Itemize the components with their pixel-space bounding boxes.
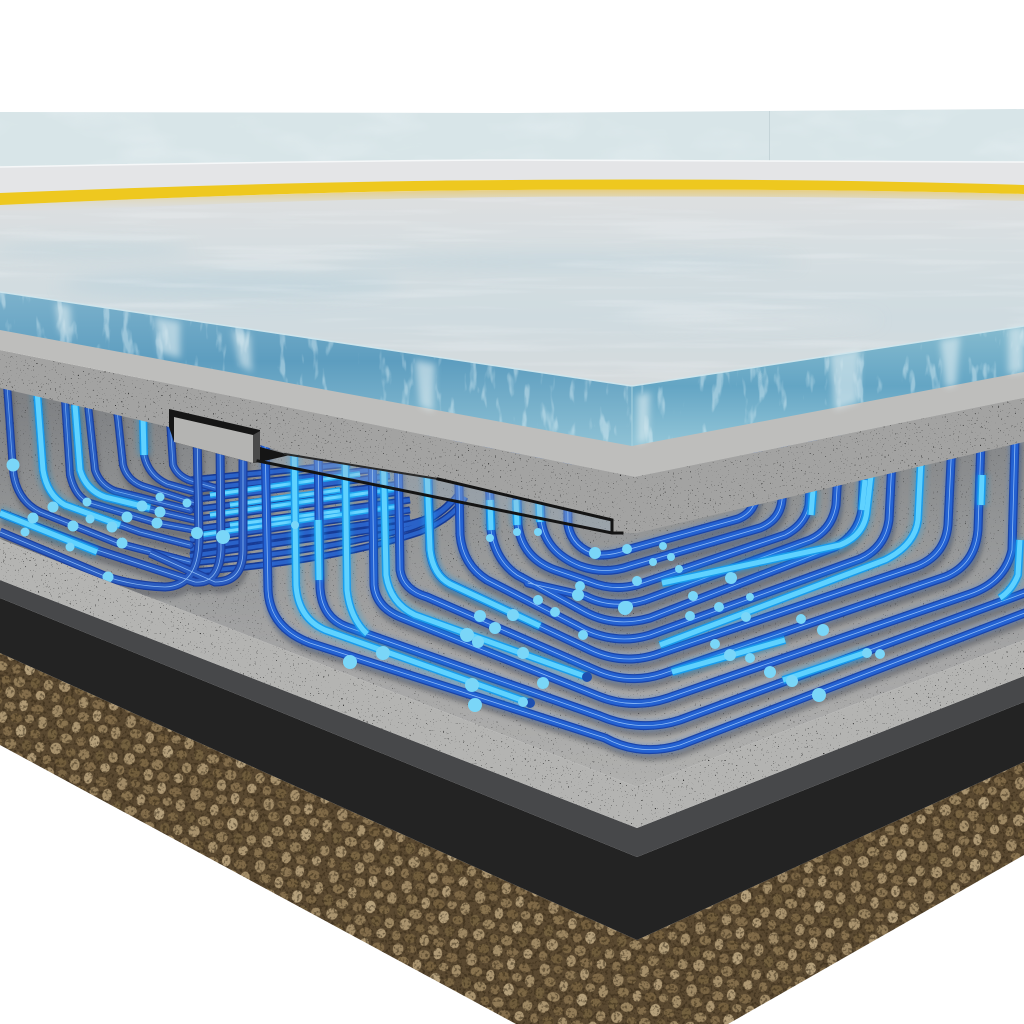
left ice face <box>0 292 632 446</box>
cooling pipe network <box>0 385 1024 757</box>
black rail <box>258 454 622 533</box>
lower concrete slab side <box>0 539 1024 828</box>
black insulation layer <box>0 598 1024 940</box>
blue tint patches <box>23 244 650 297</box>
right ice face <box>632 326 1024 446</box>
cut pipe ends <box>525 672 592 708</box>
grey block <box>174 417 253 463</box>
ice slab cut faces <box>0 292 1024 446</box>
gravel sub-base <box>0 653 1024 1024</box>
ice surface <box>0 180 1024 386</box>
frost streaks <box>55 303 1024 444</box>
upper concrete slab front face <box>0 350 1024 533</box>
rink boards and glass <box>0 109 1024 194</box>
yellow kick plate line <box>0 180 1024 205</box>
back tangle of pipes <box>190 464 465 572</box>
upper concrete slab top face <box>0 328 1024 477</box>
surface scratches <box>0 198 1024 386</box>
ice top edge highlight <box>0 292 1024 386</box>
glass channel under the slab <box>260 453 612 533</box>
coolant droplets <box>6 458 885 712</box>
main nested pipe loops <box>265 440 1024 750</box>
dark grey layer <box>0 580 1024 857</box>
front U-shaped pipes <box>0 430 243 587</box>
glowing coolant sections <box>0 390 1020 703</box>
cavity floor and back wall <box>0 380 1024 787</box>
pipe shadows <box>2 392 1024 757</box>
slab notch with sensor block <box>169 409 290 463</box>
left pipe group <box>7 385 215 562</box>
frost marbling <box>0 292 1024 446</box>
